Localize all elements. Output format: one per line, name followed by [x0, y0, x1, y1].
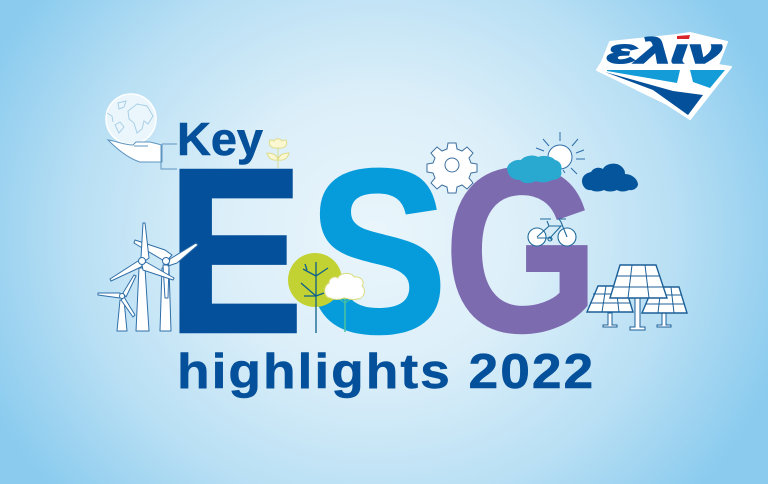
heading: letter E: E	[167, 120, 303, 382]
turbine right	[134, 240, 198, 331]
icon: globe in hand	[106, 94, 177, 169]
logo: ελιν	[607, 33, 722, 71]
left panel	[587, 286, 633, 327]
icon: bicycle	[528, 219, 576, 246]
turbine left	[98, 275, 136, 331]
centre panel	[610, 265, 667, 330]
icon: flower	[267, 139, 289, 168]
heading: letter G: G	[444, 120, 599, 382]
icon: gear	[427, 143, 477, 193]
turbine middle	[110, 223, 174, 331]
icon: white tree	[325, 273, 364, 332]
icon: solar panels	[587, 265, 687, 330]
icon: teal cloud	[507, 156, 562, 183]
icon: navy cloud	[582, 164, 638, 192]
icon: wind turbines	[98, 223, 198, 331]
icon: sun	[535, 132, 585, 174]
icon: green tree	[288, 253, 342, 333]
heading: Key: Key	[177, 113, 263, 165]
right panel	[642, 287, 687, 327]
heading: highlights 2022: highlights 2022	[177, 344, 595, 399]
heading: letter S: S	[308, 121, 448, 383]
logo	[597, 33, 731, 119]
